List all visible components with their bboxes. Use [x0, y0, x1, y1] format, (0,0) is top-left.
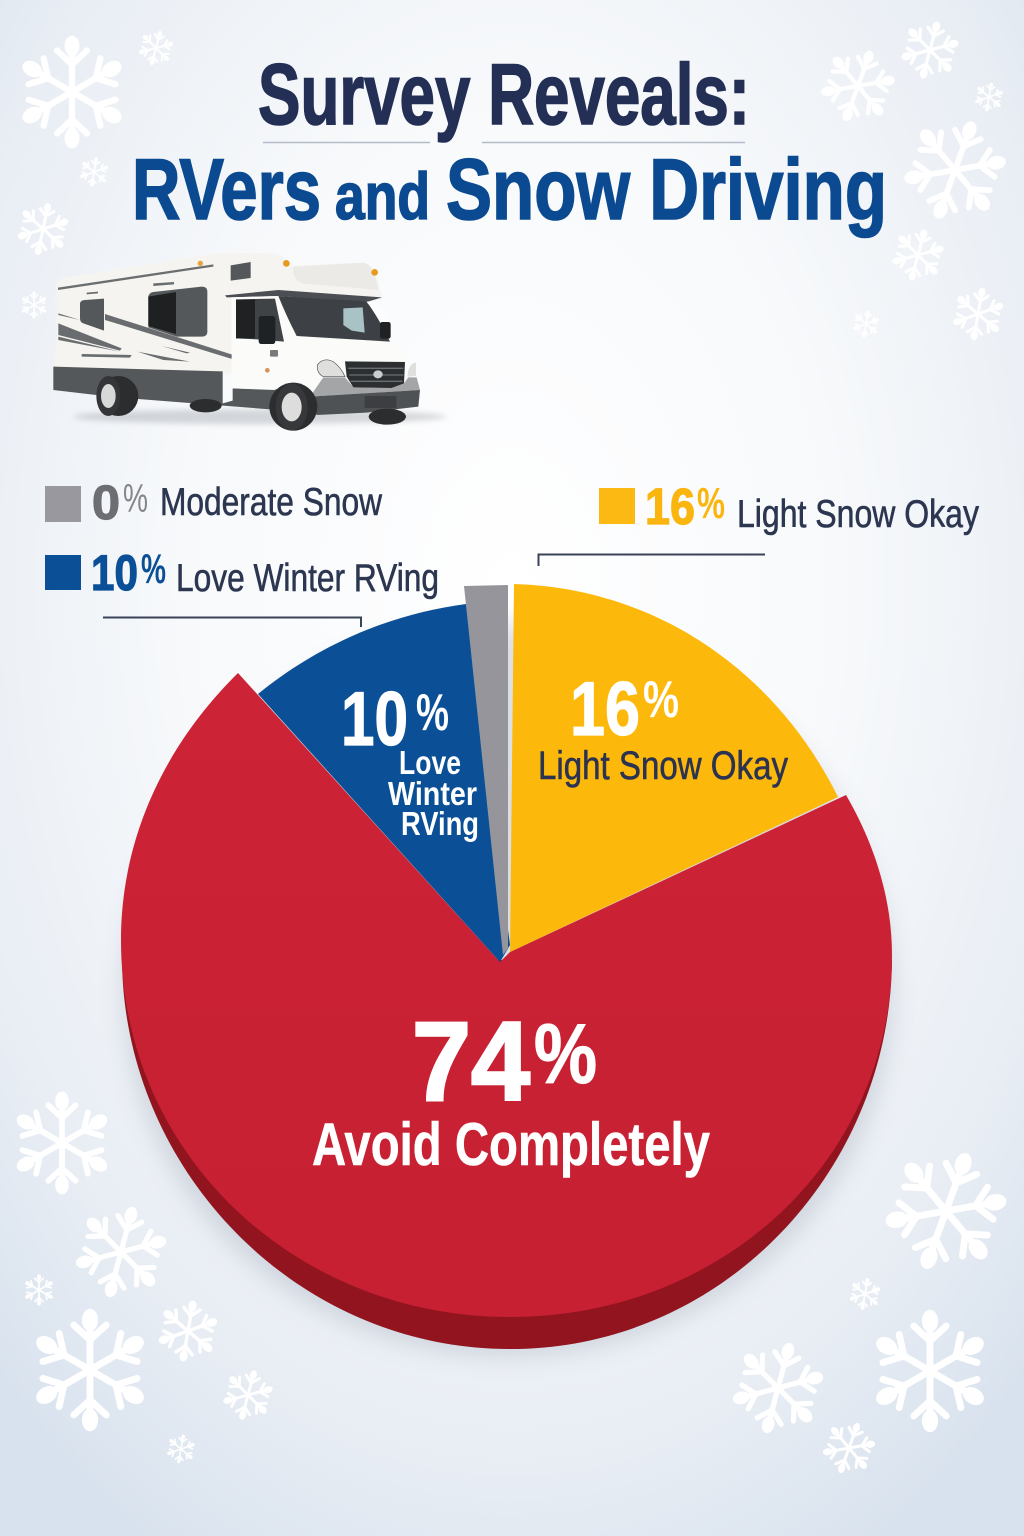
- slice: love winter rving 10%: Winter: [388, 775, 477, 812]
- title: [132, 47, 887, 238]
- slice: light snow okay 16%: 16: [570, 667, 640, 752]
- pie depth edge: [122, 960, 892, 1349]
- legend: love winter rving: %: [141, 545, 166, 592]
- legend: love winter rving: 10: [91, 545, 138, 601]
- front bumper: [310, 377, 420, 397]
- snowflakes: bottom: [11, 1092, 1024, 1482]
- stripes and vents: [58, 264, 213, 290]
- title line 2: [132, 142, 887, 238]
- legend: light snow okay: [599, 478, 979, 536]
- legend: light snow okay: %: [697, 479, 725, 528]
- legend: moderate snow: %: [123, 477, 148, 521]
- slice: light snow okay 16%: %: [643, 671, 679, 729]
- slice: love winter rving 10%: Love: [399, 744, 461, 781]
- legend: light snow okay: Light Snow Okay: [737, 493, 979, 536]
- slice: love winter rving 10%: %: [416, 684, 449, 742]
- legend: moderate snow: 0: [92, 477, 120, 530]
- cab and hood: [232, 296, 417, 397]
- RV side windows: [80, 299, 104, 331]
- title line 2: Snow Driving: [446, 142, 887, 238]
- slice: light snow okay 16%: Light Snow Okay: [538, 744, 788, 788]
- legend: moderate snow: [45, 477, 383, 530]
- legend: light snow okay: 16: [645, 478, 695, 535]
- legend: love winter rving: [45, 545, 439, 601]
- slice: love winter rving 10%: RVing: [401, 805, 479, 842]
- title line 2: RVers: [132, 142, 321, 238]
- slice: avoid completely 74%: 74: [412, 999, 530, 1124]
- slice: avoid completely 74%: [121, 673, 892, 1317]
- slice: avoid completely 74%: %: [534, 1007, 597, 1101]
- RV body: [53, 253, 383, 373]
- legend: moderate snow: Moderate Snow: [160, 481, 383, 524]
- slice: moderate snow 0%: [464, 585, 508, 955]
- slice: love winter rving 10%: [258, 604, 510, 962]
- snowflakes: top: [12, 14, 1021, 345]
- slice: love winter rving 10%: 10: [341, 677, 408, 762]
- wheels: [96, 376, 406, 431]
- marker lights: [283, 260, 290, 267]
- cab side window: [236, 299, 284, 342]
- slice: light snow okay 16%: [510, 584, 838, 952]
- legend: love winter rving: Love Winter RVing: [176, 557, 439, 600]
- illustration: motorhome RV: [53, 253, 447, 431]
- lower skirt: [53, 367, 278, 410]
- title line 2: and: [335, 159, 430, 233]
- legend: [45, 477, 979, 627]
- slice: avoid completely 74%: Avoid Completely: [312, 1111, 710, 1178]
- windshield: [278, 296, 390, 342]
- title line 1: Survey Reveals:: [258, 47, 750, 143]
- pie chart: [121, 584, 893, 1357]
